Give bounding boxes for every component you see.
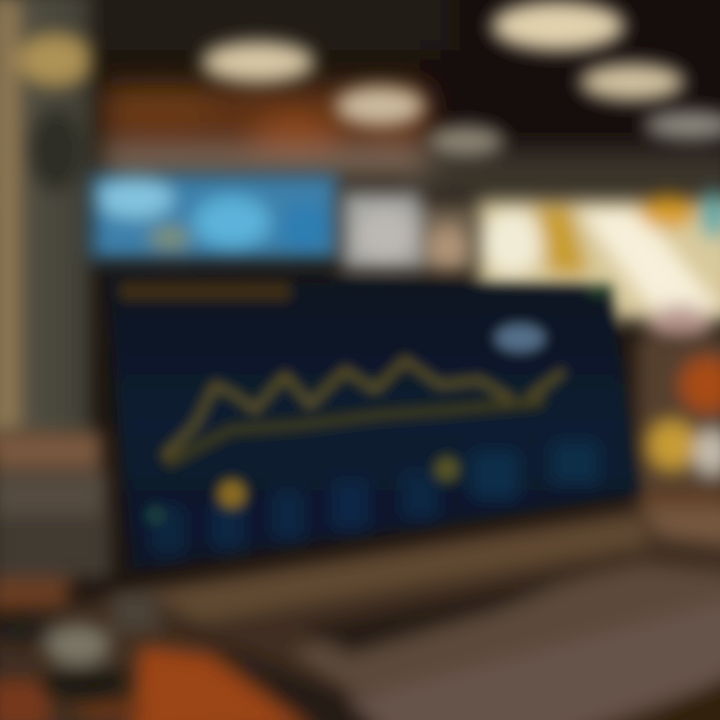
ceiling lights	[202, 2, 720, 156]
foreground chair	[0, 592, 158, 696]
wood beam band	[100, 85, 430, 178]
colourful right wall	[478, 191, 720, 345]
gold line chart	[165, 360, 562, 462]
ceiling background	[0, 0, 720, 200]
blue windows	[92, 175, 337, 259]
pale central panels	[342, 192, 475, 273]
screen lower bars	[150, 440, 600, 555]
pillar base and left furniture	[0, 432, 112, 614]
gold chart markers	[146, 456, 460, 524]
table foreground	[0, 595, 720, 720]
pillar	[0, 0, 92, 440]
table top	[0, 505, 720, 720]
dark trading screen	[106, 276, 640, 572]
right side orange and yellow blocks	[635, 335, 720, 520]
